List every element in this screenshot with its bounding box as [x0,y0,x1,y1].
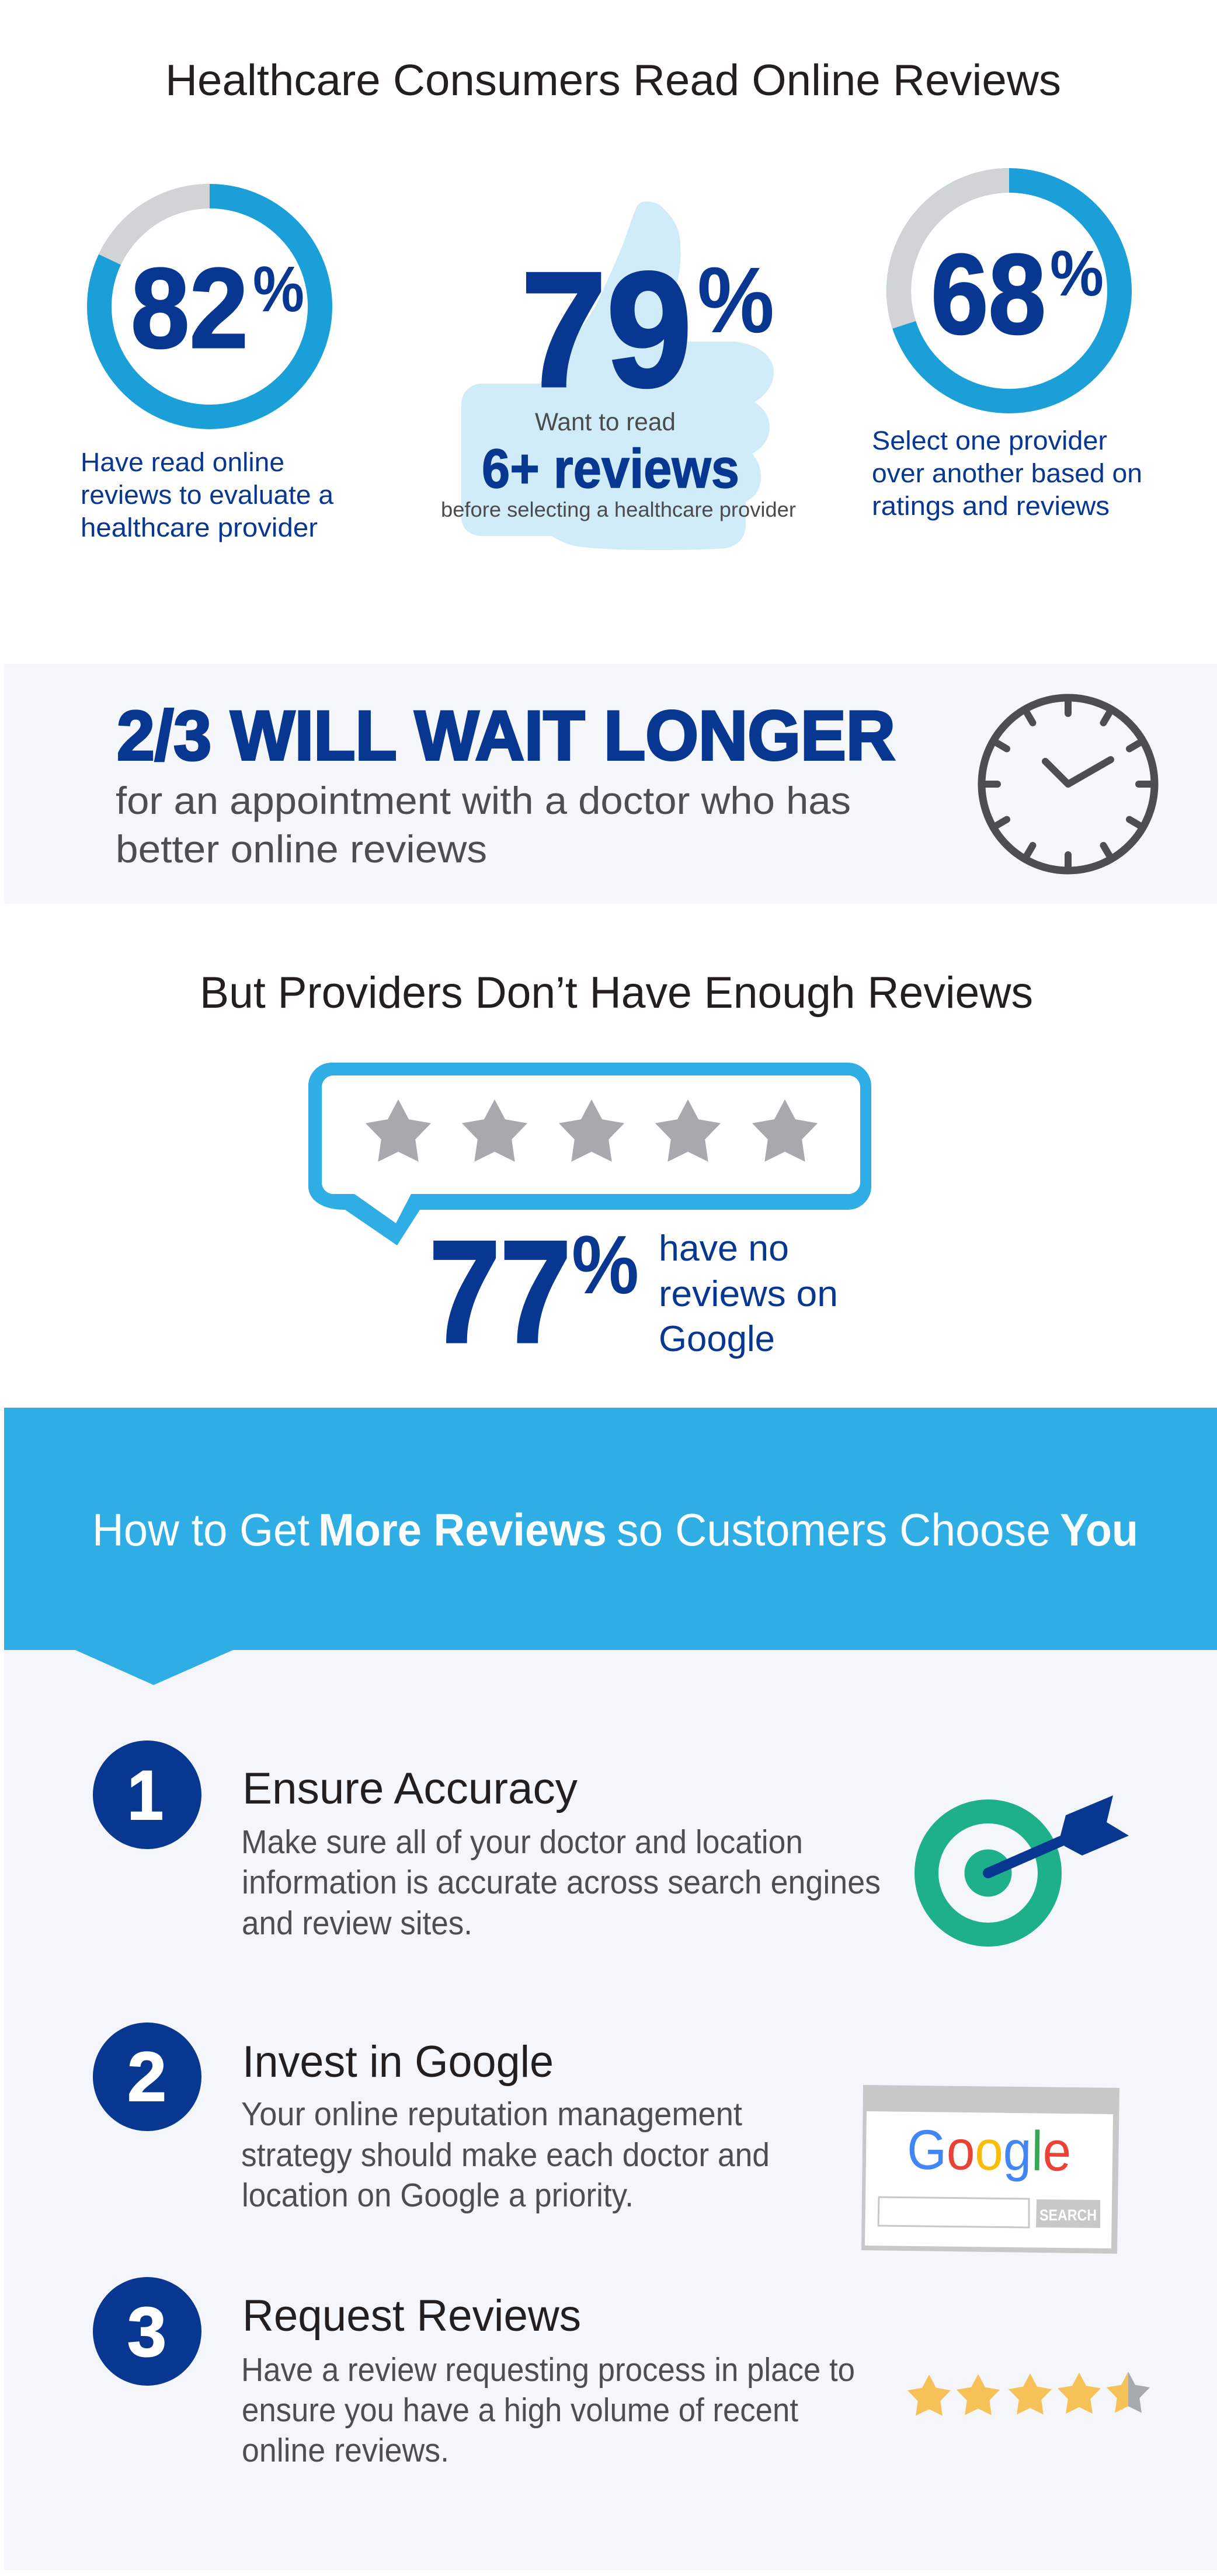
panel: how-to light background [4,1650,1217,2570]
number: 77: 77 [429,1210,571,1373]
caption: 82 percent [81,447,334,542]
heading: 2/3 will wait longer: 2/3 WILL WAIT LONGER [117,697,895,775]
badge: number 1 [93,1740,201,1849]
text: appointment note: for an appointment with a doctor who has [116,779,851,822]
heading: providers lack reviews: But Providers Don’t Have Enough Reviews [200,968,1033,1018]
text: invest in google body: location on Google a priority. [242,2177,634,2214]
text: ensure accuracy body [241,1823,881,1942]
heading: request reviews: Request Reviews [242,2291,581,2341]
donut chart: 68 percent [899,180,1119,401]
badge: number 1: 1 [127,1756,164,1834]
icon: speech bubble [308,1063,871,1245]
text: invest in google body: strategy should make each doctor and [241,2136,770,2174]
icon: five grey stars [366,1099,818,1162]
heading: banner text [92,1504,1138,1555]
text: request reviews body: ensure you have a high volume of recent [242,2391,798,2429]
banner: how to get more reviews [4,1408,1217,1685]
heading: banner text: You [1060,1504,1138,1555]
number: 79: 79 [521,239,692,421]
number: 82: 82 [131,245,248,372]
icon: target with arrow [926,1795,1129,1935]
icon: google search window [861,2085,1119,2254]
text: have no reviews on google [659,1228,838,1359]
text: before selecting a healthcare provider: before selecting a healthcare provider [441,497,796,521]
badge: number 2 [93,2022,201,2131]
text: request reviews body: online reviews. [242,2432,449,2469]
heading: invest in google: Invest in Google [242,2037,554,2087]
caption: 82 percent: healthcare provider [81,513,318,542]
text: have no reviews on google: Google [659,1319,775,1359]
number: 68: 68 [931,231,1046,358]
panel: 68 percent stat [872,180,1142,521]
text: 6+ reviews: 6+ reviews [482,438,739,500]
text: request reviews body: Have a review requesting process in place to [241,2351,855,2389]
percent sign: % [253,253,304,325]
panel: will wait longer band [4,664,1217,904]
donut chart: 82 percent [99,196,320,417]
panel: 79 percent stat with thumbs up [441,201,796,550]
text: request reviews body [241,2351,855,2469]
text: appointment note [116,779,851,871]
caption: 68 percent [872,426,1142,521]
panel: 82 percent stat [81,196,334,542]
step 1: ensure accuracy [93,1740,1129,1942]
panel: 77 percent no reviews [308,1063,871,1373]
icon: thumbs up [461,201,774,550]
icon: four and a half yellow stars [907,2372,1150,2416]
badge: number 2: 2 [127,2038,166,2116]
text: ensure accuracy body: Make sure all of your doctor and location [241,1823,803,1861]
percent sign: % [697,248,774,352]
text: invest in google body [241,2095,770,2214]
step 3: request reviews [93,2277,1150,2469]
badge: number 3: 3 [127,2293,166,2371]
caption: 68 percent: over another based on [872,458,1142,488]
text: invest in google body: Your online reputation management [241,2095,742,2133]
heading: ensure accuracy: Ensure Accuracy [242,1764,578,1813]
title: healthcare consumers: Healthcare Consumers Read Online Reviews [165,55,1061,105]
caption: 82 percent: Have read online [81,447,284,477]
text: ensure accuracy body: and review sites. [242,1905,472,1942]
heading: banner text: How to Get [92,1504,310,1555]
heading: banner text: More Reviews [318,1504,607,1555]
text: want to read: Want to read [535,408,676,436]
text: ensure accuracy body: information is accurate across search engines [242,1864,881,1901]
logo: google: Google [907,2118,1072,2183]
text: appointment note: better online reviews [116,827,487,871]
step 2: invest in google [93,2022,1119,2254]
icon: google search window: SEARCH [1039,2206,1097,2224]
percent sign: % [1050,238,1104,309]
text: have no reviews on google: have no [659,1228,789,1269]
text: have no reviews on google: reviews on [659,1274,838,1314]
icon: clock [982,698,1155,871]
caption: 82 percent: reviews to evaluate a [81,480,334,510]
percent sign: % [572,1219,639,1311]
caption: 68 percent: ratings and reviews [872,491,1110,521]
badge: number 3 [93,2277,201,2386]
caption: 68 percent: Select one provider [872,426,1107,455]
heading: banner text: so Customers Choose [617,1504,1051,1555]
